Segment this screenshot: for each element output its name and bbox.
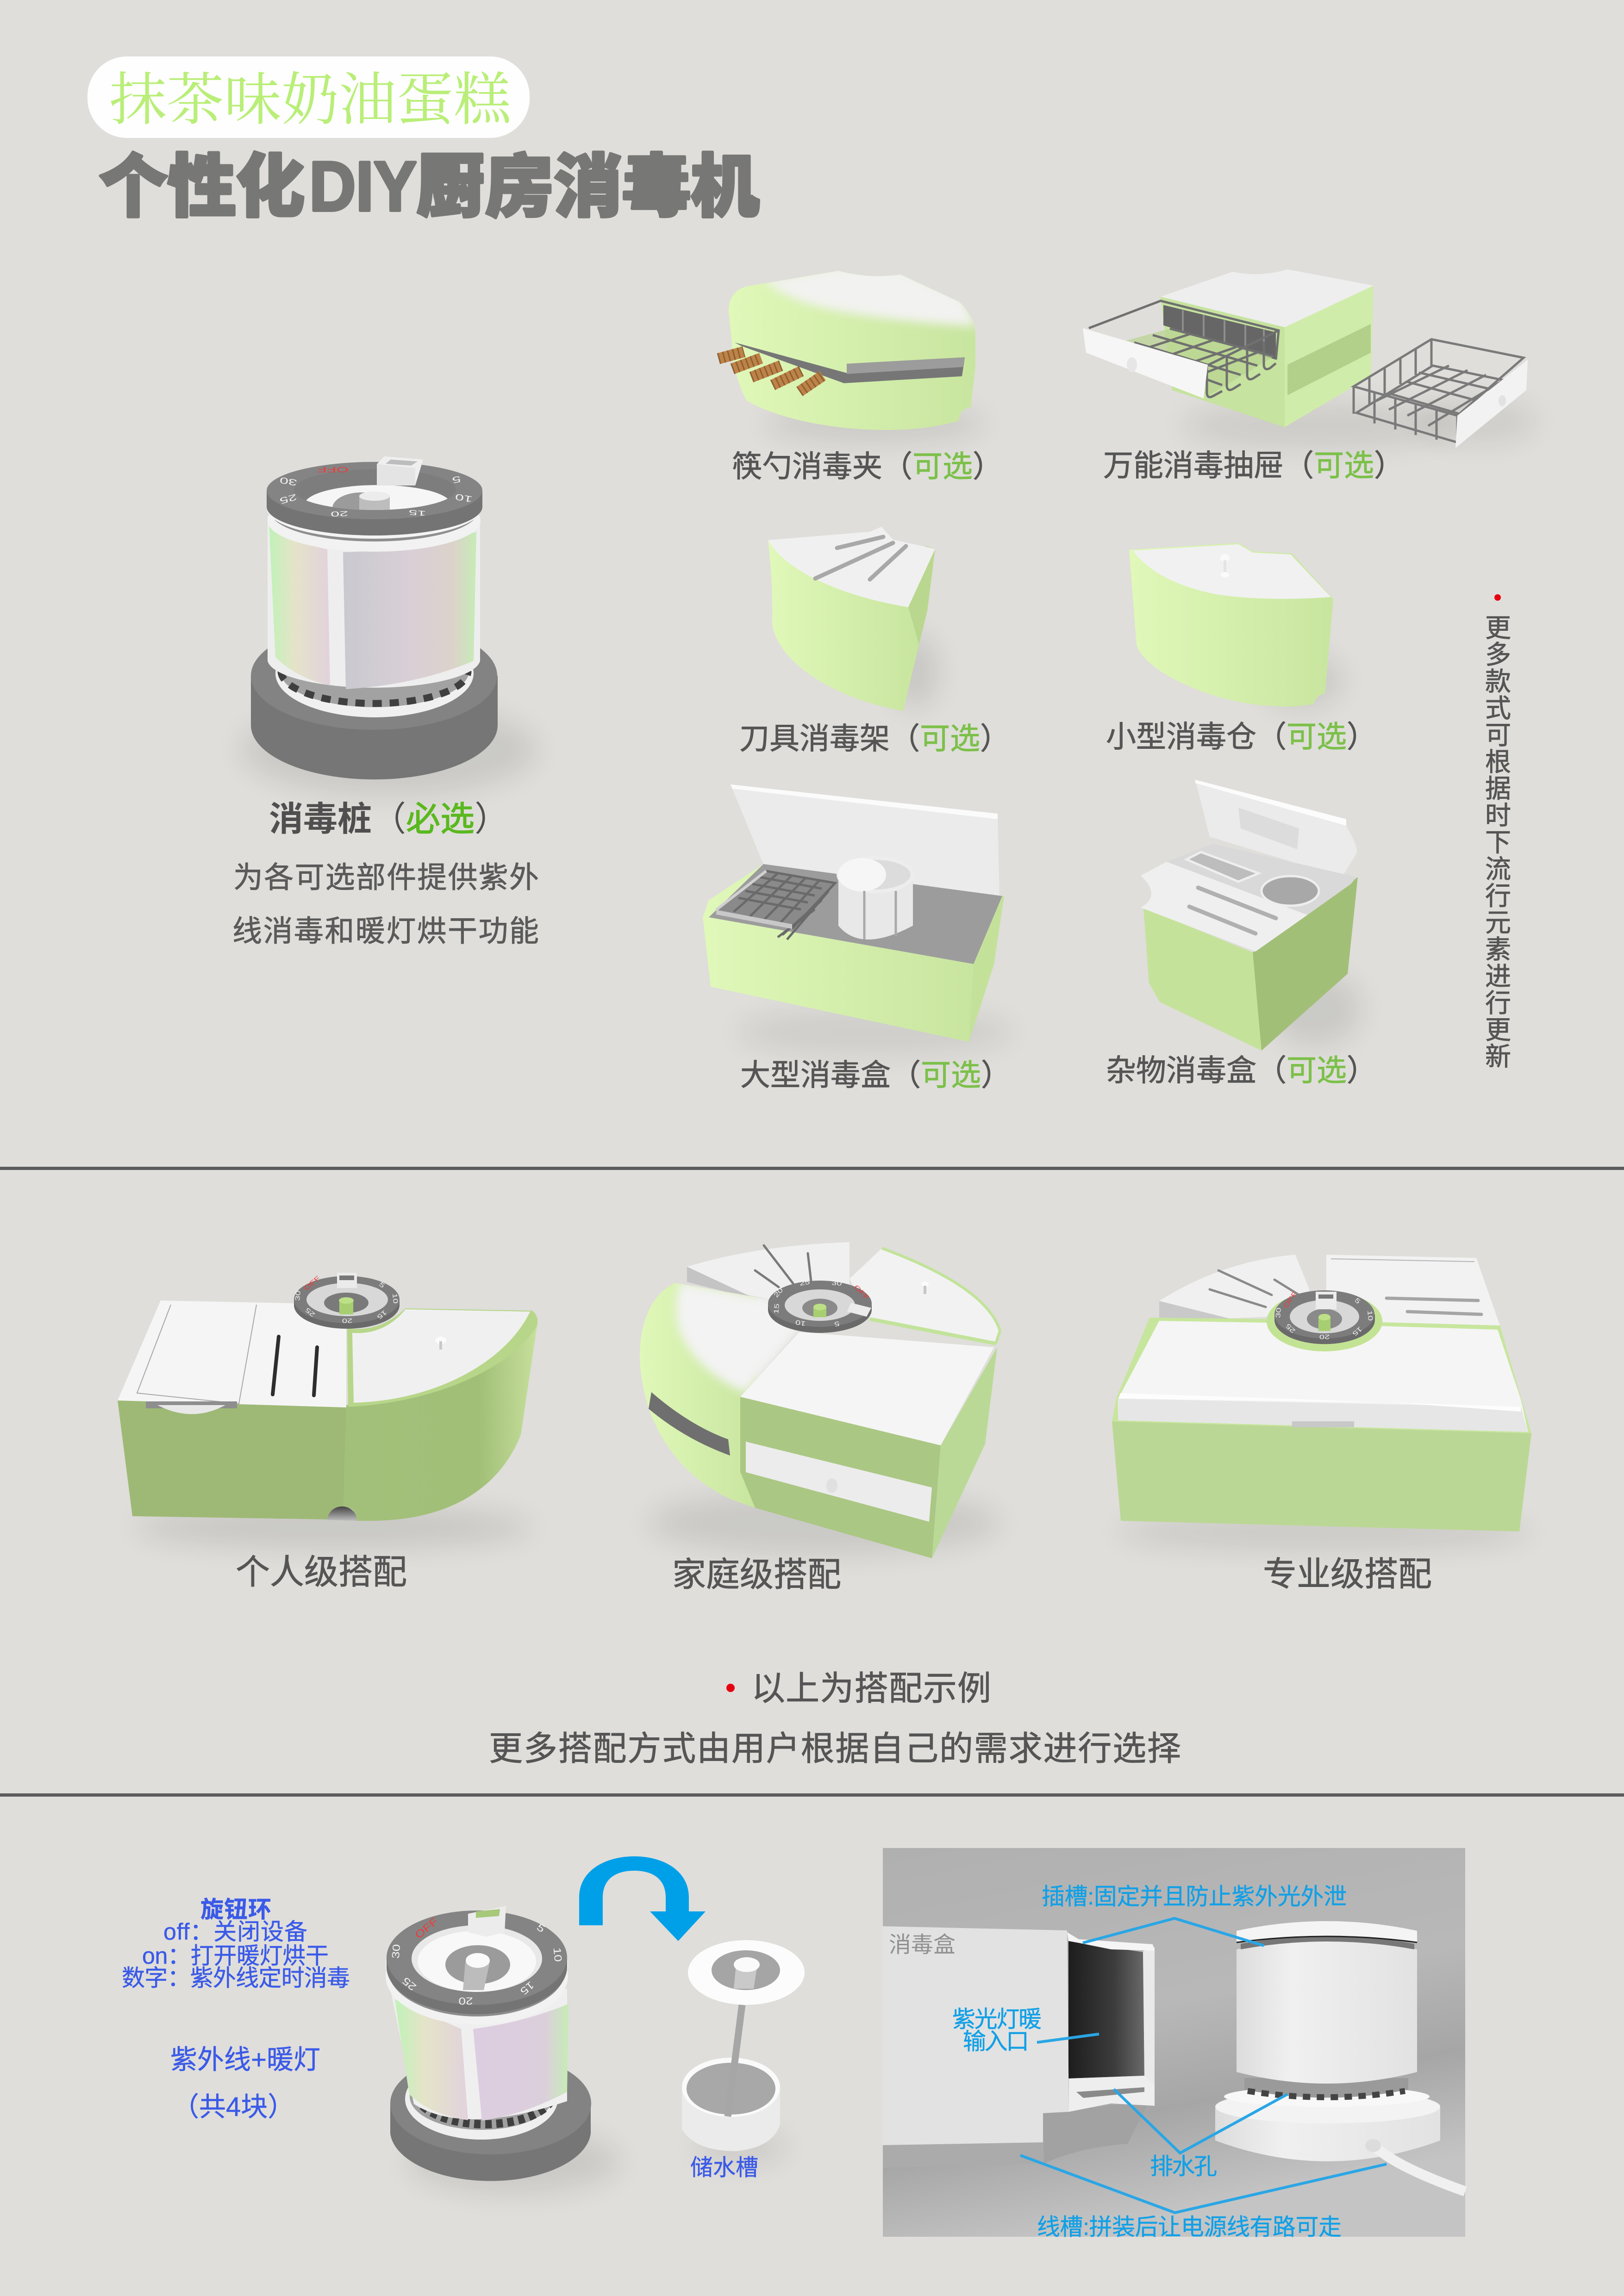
personal set render: 15 (375, 1308, 388, 1321)
callout: knob ring functions (122, 1897, 350, 1991)
knob description: on：打开暖灯烘干 (142, 1943, 329, 1969)
callout lines (1020, 1918, 1387, 2213)
personal set render: 20 (342, 1317, 352, 1325)
personal set render: 30 (294, 1290, 302, 1301)
module: misc box (1141, 780, 1361, 1051)
water tank assembly (682, 1940, 805, 2180)
callout: lamp count (170, 2045, 320, 2122)
callout: input port (952, 2006, 1042, 2054)
dial (294, 1300, 400, 1329)
dial numbers: 30 (279, 475, 298, 488)
dial numbers: 15 (408, 508, 426, 518)
main title: 个性化 (99, 149, 305, 225)
family set render: 10 (795, 1319, 806, 1328)
dial (1267, 1291, 1382, 1351)
professional set render: 15 (1351, 1325, 1364, 1338)
family set render: 20 (772, 1286, 785, 1299)
knob description: off：关闭设备 (163, 1919, 307, 1945)
panel: optional modules (703, 266, 1537, 1092)
label: box name: 消毒盒 (889, 1933, 956, 1957)
hub white model (1215, 1921, 1465, 2191)
cap disc (688, 1940, 805, 2005)
title block (87, 56, 759, 226)
lamp quantity: （共4块） (172, 2092, 294, 2122)
personal set render (118, 1273, 537, 1521)
label: large box: 大型消毒盒（可选） (740, 1058, 1011, 1092)
dial numbers: 15 (518, 1979, 536, 1997)
dial numbers (390, 1916, 564, 2006)
personal set render: OFF (302, 1274, 321, 1292)
callout: cable channel: 线槽:拼装后让电源线有路可走 (1037, 2214, 1342, 2240)
red bullet (1494, 594, 1501, 601)
family set render (639, 1242, 1000, 1558)
label: personal set: 个人级搭配 (236, 1553, 407, 1591)
tank cup (682, 2087, 780, 2151)
dial numbers: 10 (454, 492, 473, 504)
dial numbers: 20 (458, 1995, 473, 2006)
dial numbers: 25 (279, 492, 298, 506)
dial numbers: OFF (413, 1916, 440, 1941)
family set render: 5 (834, 1320, 840, 1328)
hub with top view (386, 1906, 620, 2194)
professional set render (1112, 1255, 1531, 1531)
hub name: 消毒桩（必选） (269, 800, 509, 838)
dial numbers: 5 (451, 474, 462, 485)
panel: personal set (118, 1273, 537, 1591)
removed drawer (1417, 398, 1537, 444)
professional set render: 20 (1319, 1333, 1330, 1341)
chopsticks (718, 352, 823, 392)
label: misc box: 杂物消毒盒（可选） (1106, 1053, 1377, 1087)
professional set render: 5 (1353, 1296, 1362, 1305)
callout: input port: 输入口 (963, 2028, 1029, 2054)
panel: sterilising hub (232, 456, 539, 948)
arrow: lift-off direction (579, 1856, 706, 1941)
panel: professional set (1112, 1255, 1532, 1593)
knob description (122, 1919, 350, 1991)
lamp type: 紫外线+暖灯 (170, 2045, 320, 2075)
rod (728, 2005, 742, 2116)
inner cylinder (838, 875, 913, 940)
panel: detail photo (883, 1848, 1465, 2240)
divider (0, 1167, 1624, 1170)
vertical note text: 更多款式可根据时下流行元素进行更新 (1481, 614, 1511, 1070)
photo background (883, 1848, 1465, 2237)
family set render: 30 (831, 1279, 842, 1287)
subtitle: cake flavour: 抹茶味奶油蛋糕 (109, 68, 513, 132)
label: universal drawer: 万能消毒抽屉（可选） (1103, 448, 1404, 482)
hub description (232, 861, 539, 948)
callout: input port: 紫光灯暖 (952, 2006, 1042, 2032)
title pill (87, 56, 530, 138)
module: knife rack (768, 527, 937, 711)
inner basket (716, 871, 835, 929)
knob description: 数字：紫外线定时消毒 (122, 1965, 350, 1991)
personal set render: 10 (391, 1293, 400, 1304)
tank label: 储水槽 (690, 2155, 758, 2180)
family set render: 15 (772, 1303, 781, 1314)
label: chopstick clip: 筷勺消毒夹（可选） (732, 449, 1003, 483)
professional set render: OFF (1282, 1290, 1299, 1309)
hub product render (251, 456, 498, 779)
hub description: 线消毒和暖灯烘干功能 (232, 915, 539, 948)
label: family set: 家庭级搭配 (672, 1556, 841, 1593)
main title: DIY (309, 147, 417, 226)
hub shadow (241, 703, 537, 796)
dial numbers (279, 465, 473, 518)
main title: 厨房消毒机 (417, 149, 759, 225)
dial numbers: 5 (535, 1922, 547, 1935)
family set render: OFF (853, 1283, 871, 1301)
note line one: 以上为搭配示例 (751, 1670, 991, 1707)
red bullet (726, 1684, 735, 1692)
personal set render: 25 (304, 1306, 317, 1319)
module: chopstick clip (718, 266, 986, 442)
dial numbers: 30 (390, 1944, 403, 1959)
drawer basket (1163, 305, 1276, 360)
label: knife rack: 刀具消毒架（可选） (739, 722, 1010, 755)
dial (768, 1304, 872, 1333)
panel: family set (639, 1242, 1000, 1593)
module: small chamber (1129, 543, 1343, 708)
module: large box (703, 784, 1014, 1055)
side note: more styles (1481, 594, 1511, 1070)
module cutaway (883, 1926, 1155, 2168)
module: universal drawer (1083, 269, 1537, 449)
divider (0, 1793, 1624, 1797)
note line two: 更多搭配方式由用户根据自己的需求进行选择 (489, 1730, 1181, 1767)
family set render: 25 (799, 1278, 811, 1287)
personal set render: 5 (378, 1280, 387, 1289)
note: combination examples (489, 1670, 1181, 1767)
dial numbers: 10 (551, 1947, 564, 1962)
dial numbers: 25 (400, 1975, 418, 1993)
label: small chamber: 小型消毒仓（可选） (1106, 720, 1377, 753)
callout: drain holes: 排水孔 (1150, 2153, 1217, 2179)
knob heading: 旋钮环 (200, 1897, 271, 1923)
professional set render: 25 (1284, 1322, 1297, 1335)
label: professional set: 专业级搭配 (1263, 1556, 1432, 1593)
professional set render: 30 (1274, 1307, 1282, 1318)
callout: slot: 插槽:固定并且防止紫外光外泄 (1042, 1884, 1347, 1910)
dial numbers: OFF (317, 465, 349, 474)
hub description: 为各可选部件提供紫外 (233, 861, 539, 894)
dial numbers: 20 (331, 510, 348, 518)
professional set render: 10 (1366, 1310, 1374, 1321)
